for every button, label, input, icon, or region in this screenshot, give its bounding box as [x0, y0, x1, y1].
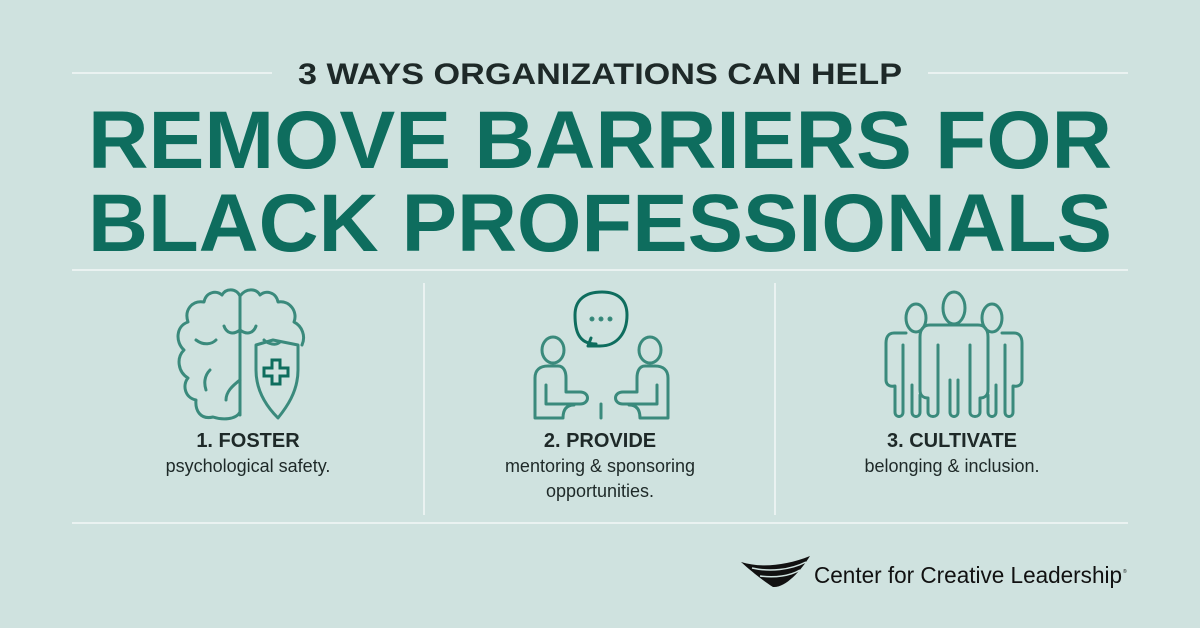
icon: brain with shield: [178, 290, 304, 419]
column 1 text: psychological safety.: [166, 456, 330, 476]
title: REMOVE BARRIERS FOR: [88, 95, 1112, 186]
column 2 text: [505, 430, 695, 501]
title: BLACK PROFESSIONALS: [88, 178, 1112, 269]
icon: mentoring: [419, 0, 668, 418]
title: [88, 95, 1112, 269]
column 3 text: [864, 430, 1040, 476]
subtitle: 3 WAYS ORGANIZATIONS CAN HELP: [298, 58, 902, 91]
logo: ®: [1123, 568, 1127, 575]
column 1 text: 1. FOSTER: [196, 430, 300, 452]
column 2 text: opportunities.: [546, 481, 654, 501]
column 3 text: belonging & inclusion.: [864, 456, 1040, 476]
icon: group of people: [886, 292, 1022, 416]
column 1 text: [166, 430, 330, 476]
column 2 text: 2. PROVIDE: [544, 430, 656, 452]
column 2 text: mentoring & sponsoring: [505, 456, 695, 476]
column 3 text: 3. CULTIVATE: [887, 430, 1017, 452]
icon: cross: [264, 360, 288, 384]
logo: Center for Creative Leadership: [814, 562, 1122, 588]
logo: [741, 556, 1127, 588]
